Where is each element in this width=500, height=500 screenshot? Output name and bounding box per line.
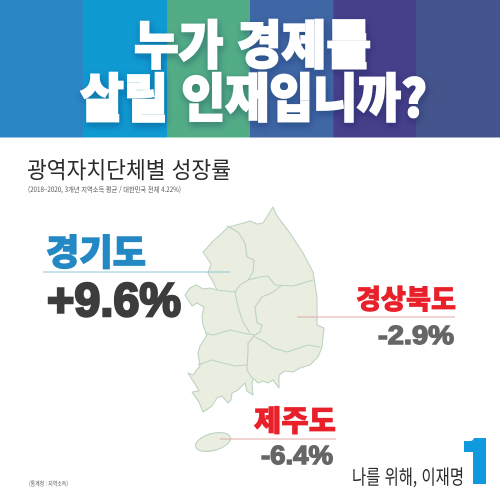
callout: Jeju-do [220, 398, 336, 470]
callout: Gyeonggi-do [43, 224, 230, 326]
callout: Jeju-do: 제주도 [254, 398, 336, 440]
map of South Korea [185, 207, 324, 455]
callout: Gyeongsangbuk-do: -2.9% [378, 320, 454, 350]
province borders [198, 226, 320, 378]
source note: (통계청 : 지역소득) [29, 479, 68, 488]
header colour band [0, 0, 500, 138]
callout: Gyeonggi-do: +9.6% [47, 273, 181, 326]
title: 누가 경제를 [134, 4, 371, 79]
subtitle heading: 광역자치단체별 성장률 [27, 151, 231, 185]
Jeju island [193, 429, 233, 455]
title: 살릴 인재입니까? [80, 57, 427, 132]
number one [464, 438, 486, 484]
callout: Jeju-do: -6.4% [261, 440, 333, 470]
mainland [185, 207, 324, 412]
callout: Gyeongsangbuk-do: 경상북도 [356, 278, 456, 317]
title [80, 4, 427, 132]
subtitle note: (2018~2020, 3개년 지역소득 평균 / 대한민국 전체 4.22%) [28, 185, 181, 195]
callout: Gyeongsangbuk-do [297, 278, 456, 350]
slogan: 나를 위해, 이재명 [352, 461, 464, 490]
callout: Gyeonggi-do: 경기도 [46, 224, 146, 276]
